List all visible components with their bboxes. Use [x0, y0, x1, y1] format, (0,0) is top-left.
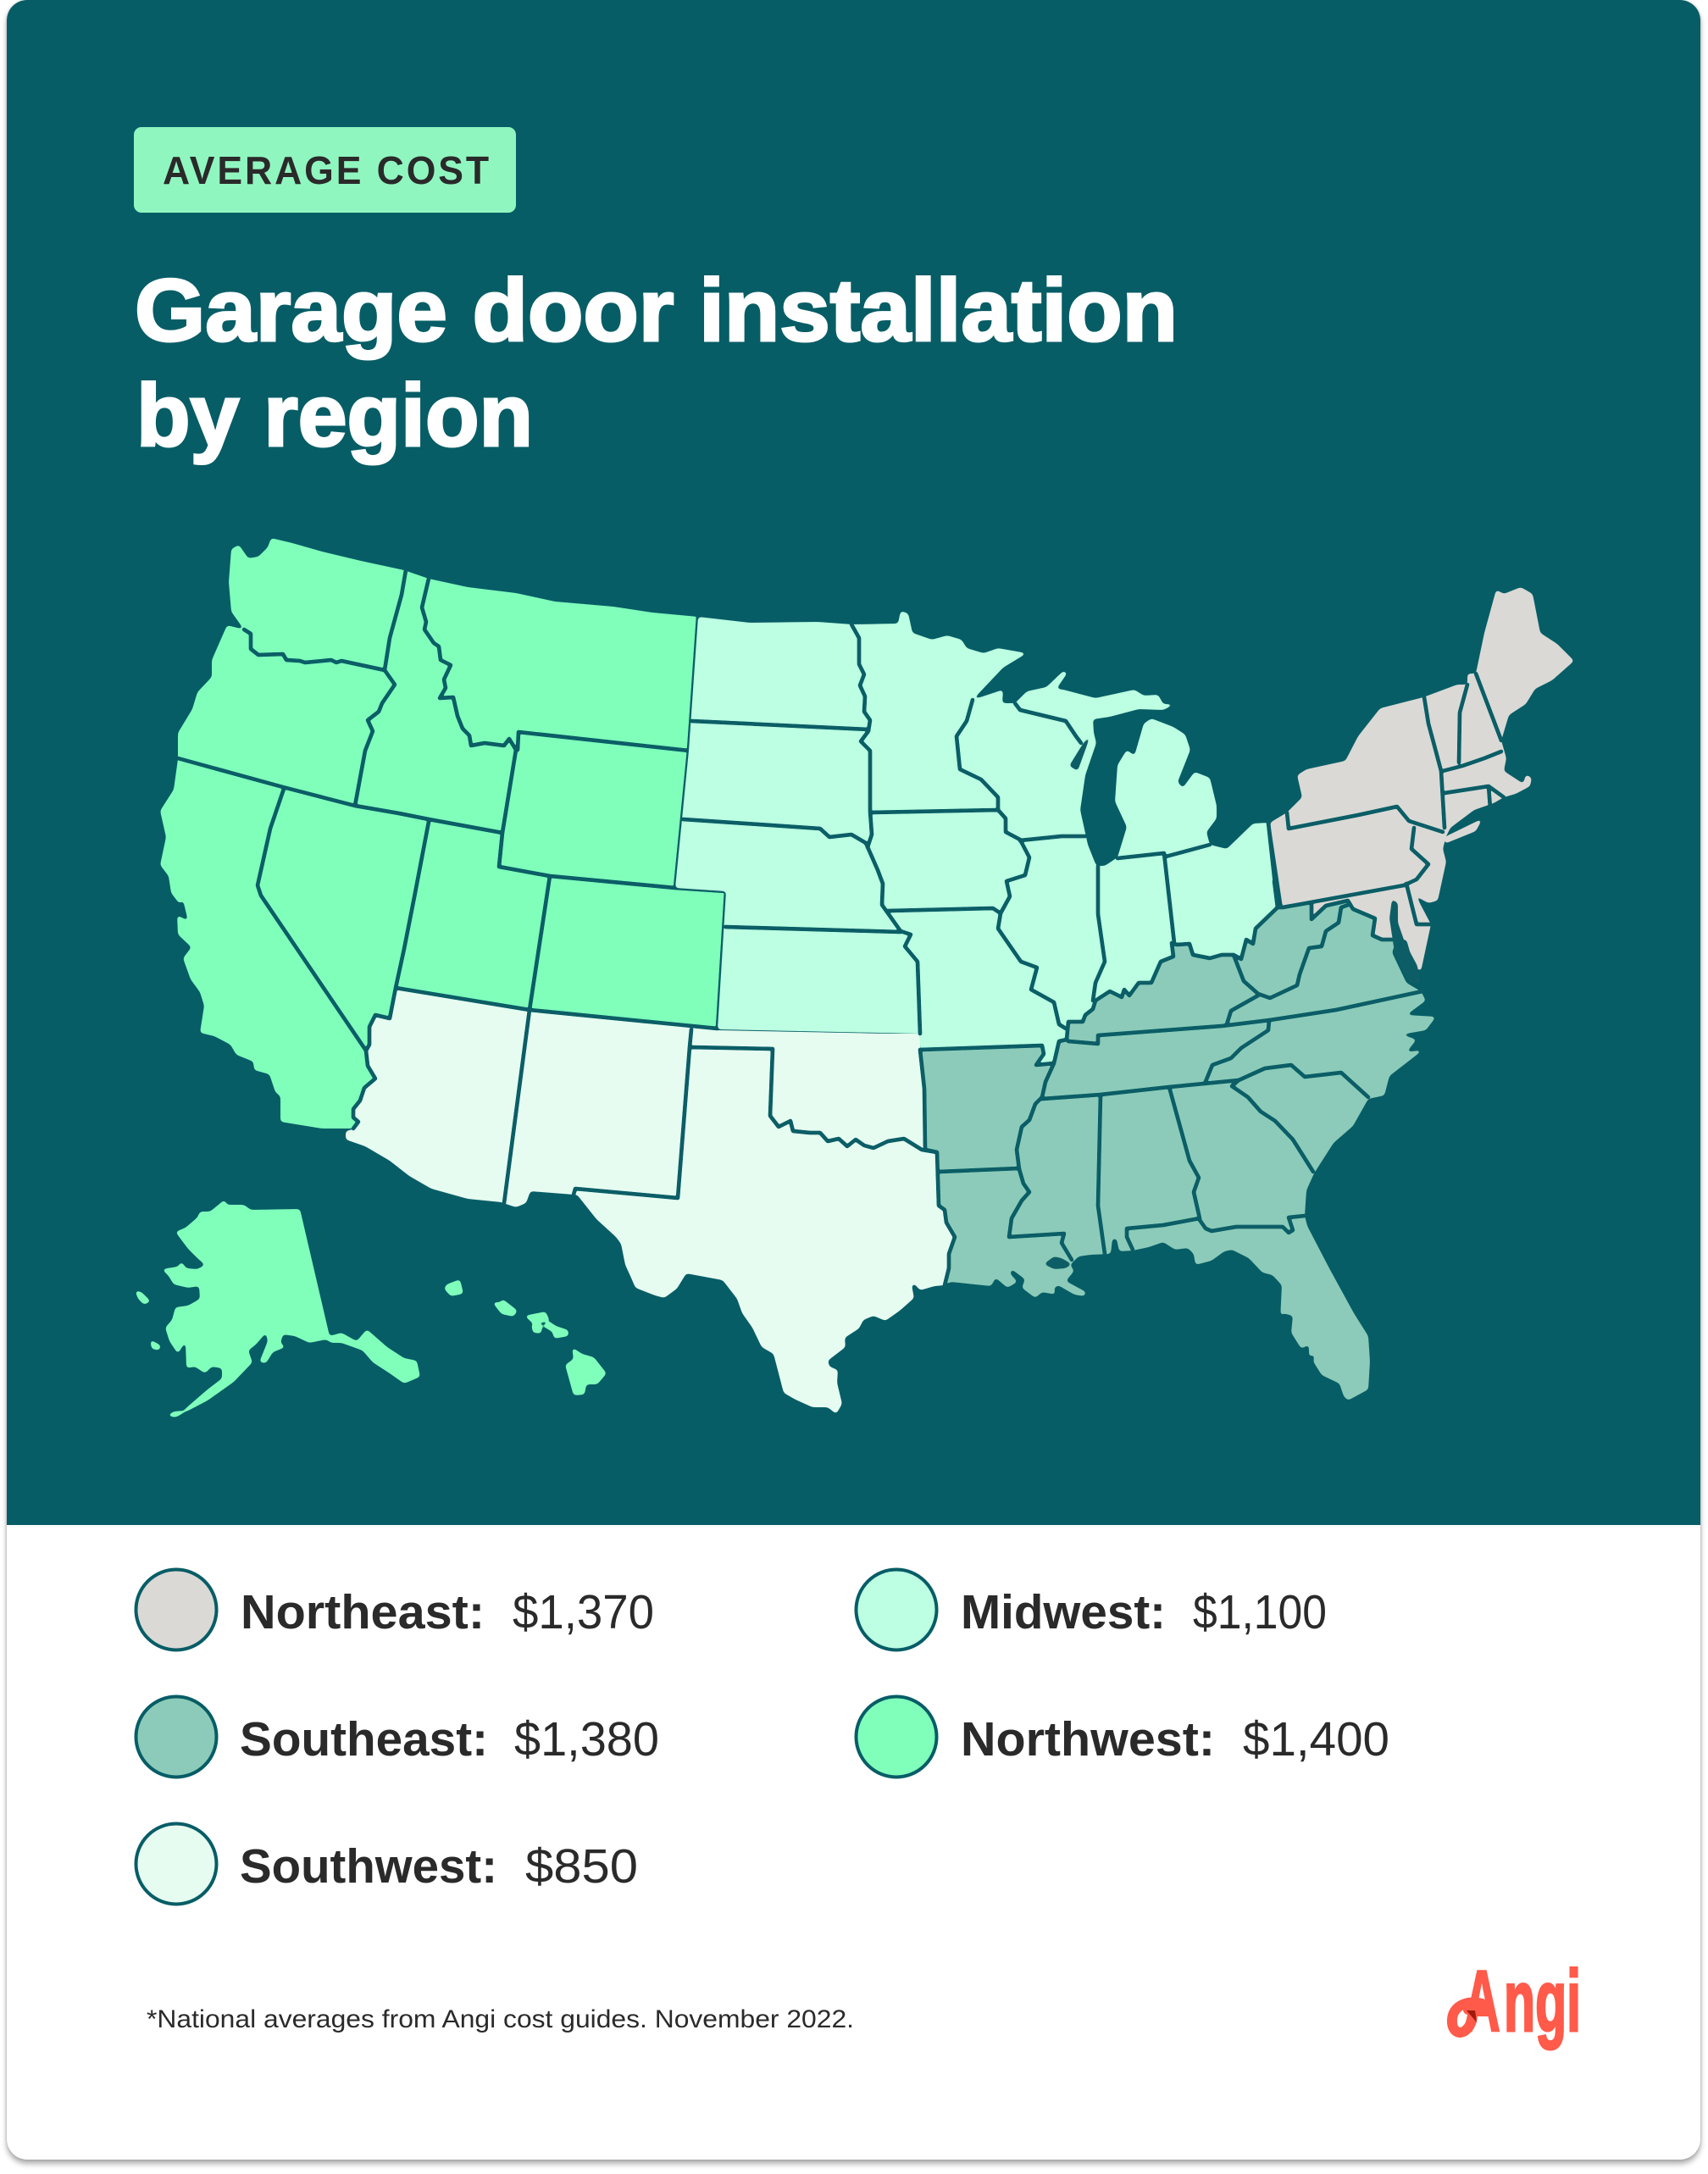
legend item: Southeast: $1,380 [514, 1712, 659, 1766]
legend item: Southeast: Southeast: [240, 1712, 488, 1766]
state borders: Southwest [504, 1010, 937, 1203]
legend item: Northwest: Northwest: [961, 1712, 1215, 1766]
legend item: Northeast: $1,370 [513, 1585, 654, 1639]
tag: average cost: AVERAGE COST [163, 148, 491, 192]
legend item: Northeast: Northeast: [241, 1585, 485, 1639]
region: Southwest states [346, 988, 955, 1414]
logo: Angi: ngi [1504, 1952, 1581, 2049]
Hawaii [444, 1279, 607, 1395]
legend item: Southwest: Southwest: [240, 1839, 497, 1894]
legend item: Midwest: Midwest: [961, 1585, 1166, 1639]
footnote: *National averages from Angi cost guides. November 2022. [147, 2005, 854, 2033]
region: Northwest states [160, 538, 726, 1129]
tag: average cost [134, 127, 516, 213]
icon: Long Island [1445, 818, 1483, 844]
legend item: Southwest [136, 1823, 638, 1905]
title: by region [136, 367, 533, 465]
state borders: Midwest [683, 624, 1210, 1034]
title [135, 262, 1178, 465]
title: Garage door installation [135, 262, 1178, 360]
Alaska [135, 1200, 420, 1417]
legend item: Northeast [136, 1569, 654, 1650]
region: Northeast states [1268, 587, 1574, 983]
legend item: Southwest: $850 [525, 1839, 638, 1894]
region: Midwest states [675, 611, 1278, 1065]
panel: teal map header [7, 0, 1700, 1525]
icon: Green Bay inlet [1069, 734, 1091, 771]
icon: Lake Pontchartrain [1044, 1256, 1072, 1269]
legend item: Southeast [136, 1696, 659, 1777]
logo: Angi [1452, 1952, 1581, 2049]
region: Southeast states [920, 879, 1436, 1400]
legend [136, 1569, 1389, 1905]
legend item: Midwest [856, 1569, 1327, 1650]
legend item: Northwest: $1,400 [1243, 1712, 1389, 1766]
state borders: Northeast [1268, 674, 1504, 940]
state borders: Northwest [178, 570, 726, 1129]
legend item: Northwest [856, 1696, 1389, 1777]
map of the United States by region [135, 538, 1574, 1417]
icon: Chesapeake Bay [1389, 899, 1420, 983]
state borders: Southeast [920, 879, 1422, 1285]
logo: Angi: A [1463, 1952, 1500, 2049]
legend item: Midwest: $1,100 [1193, 1585, 1327, 1639]
